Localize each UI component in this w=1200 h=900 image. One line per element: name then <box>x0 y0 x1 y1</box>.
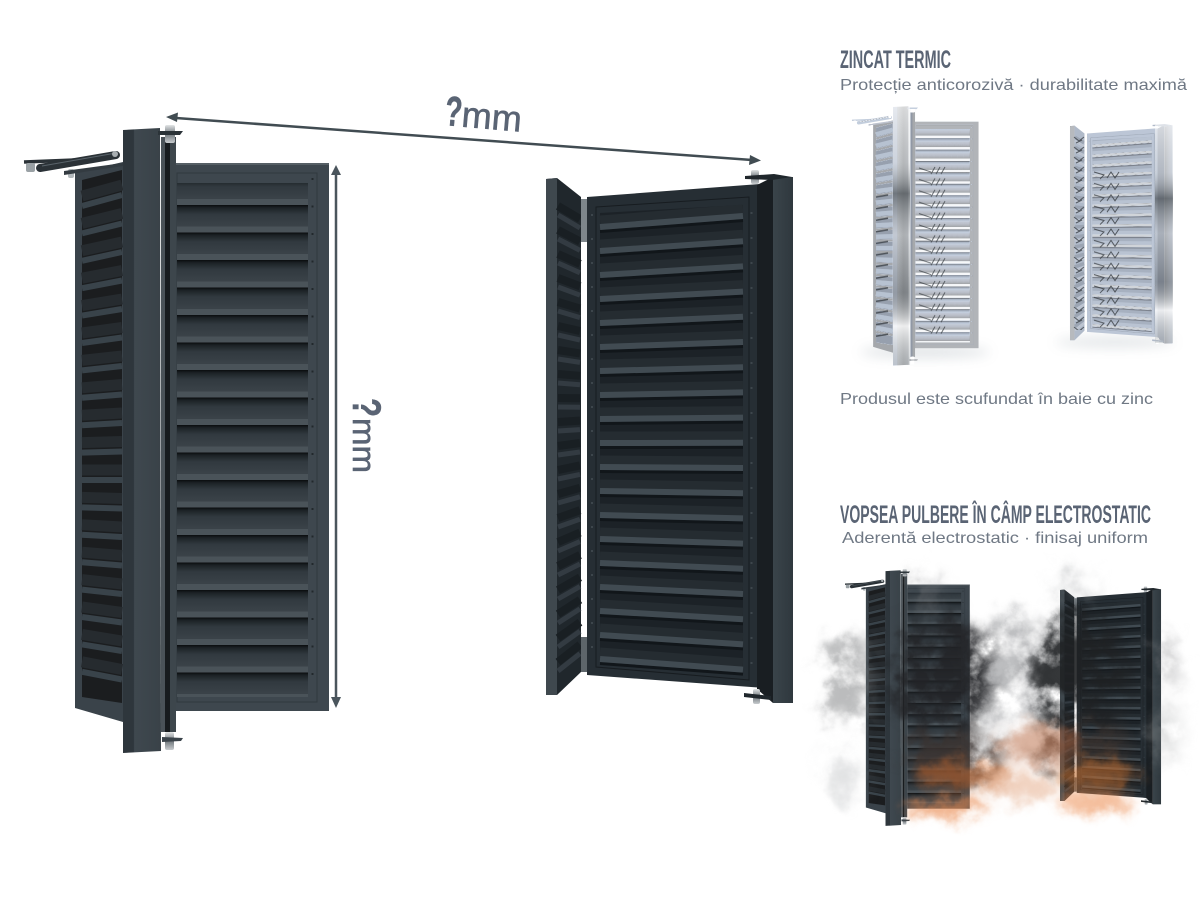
height label <box>344 398 388 473</box>
galvanized shutters <box>852 105 1175 366</box>
top pivot <box>158 125 183 143</box>
post <box>757 177 793 703</box>
subheading: zinc: Protecție anticorozivă · durabilitate maximă <box>840 77 1187 94</box>
door frame <box>587 184 764 688</box>
width label: ? <box>443 87 464 135</box>
bottom pivot <box>162 732 183 750</box>
width label <box>443 87 524 141</box>
door louvres <box>592 197 752 680</box>
subheading: powder coat: Aderentă electrostatic · finisaj uniform <box>842 530 1148 547</box>
dark left shutter <box>845 569 970 826</box>
right shutter, front view <box>546 170 793 704</box>
galvanized left shutter <box>852 105 979 366</box>
arm <box>24 151 123 178</box>
louvre panel <box>176 163 329 711</box>
hinge bar <box>161 137 176 732</box>
height label: ? <box>344 398 388 417</box>
height label: mm <box>346 418 382 473</box>
ground shadows <box>860 337 1175 358</box>
galvanized right shutter <box>1070 122 1173 344</box>
smoke cloud <box>824 573 1182 799</box>
bottom pivot <box>744 689 771 704</box>
left shutter, open wing with arm <box>24 125 329 753</box>
heading: zinc: ZINCAT TERMIC <box>840 46 951 74</box>
width arrow <box>166 112 761 165</box>
powder coated shutters in smoke <box>824 569 1182 826</box>
corner post <box>123 128 161 753</box>
hinges <box>581 199 587 672</box>
top pivot <box>745 170 792 184</box>
width label: mm <box>460 94 524 140</box>
folding side leaf <box>546 178 581 695</box>
side leaf <box>75 162 123 722</box>
dark right shutter <box>1060 586 1161 805</box>
note: zinc bath: Produsul este scufundat în baie cu zinc <box>840 391 1153 408</box>
fire glow <box>906 725 1137 817</box>
height arrow <box>331 165 341 708</box>
